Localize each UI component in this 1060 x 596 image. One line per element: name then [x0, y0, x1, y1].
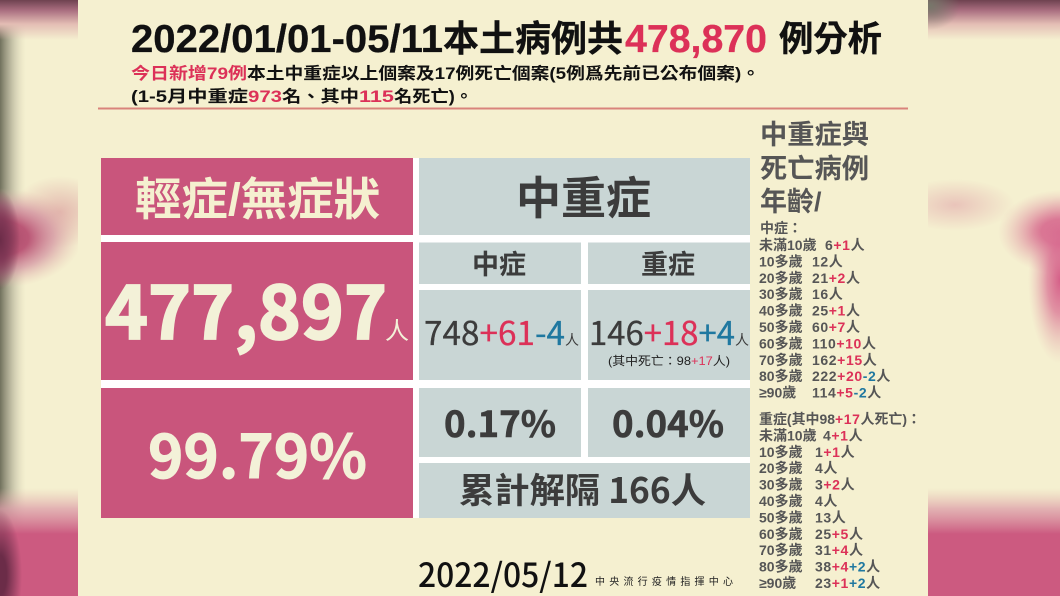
- moderate by age: +2人: [829, 270, 860, 286]
- moderate by age: 70多歲: [759, 352, 803, 368]
- moderate by age: 80多歲: [759, 368, 803, 384]
- severe percent: 0.04%: [612, 396, 724, 448]
- severe by age: +1人: [831, 427, 863, 443]
- moderate by age: 114: [812, 385, 836, 401]
- mild count: 477,897: [105, 255, 387, 361]
- moderate by age: 60: [812, 319, 829, 335]
- title: 478,870: [625, 18, 767, 61]
- severe by age: 1: [815, 444, 823, 460]
- sidebar heading: 死亡病例: [760, 154, 869, 184]
- severe by age: 10多歲: [759, 444, 803, 460]
- moderate by age: 16人: [812, 286, 843, 302]
- severe by age: +4+2人: [832, 559, 880, 575]
- heading: moderate and severe: 中重症: [516, 173, 651, 224]
- severe by age: 3: [815, 477, 823, 493]
- moderate by age: 110: [812, 335, 836, 351]
- subtitle: 973: [248, 88, 282, 106]
- moderate by age: 未滿10歲: [759, 237, 817, 253]
- severe by age: +4人: [832, 542, 863, 558]
- sidebar heading: [760, 120, 869, 217]
- moderate by age: 中症：: [760, 220, 802, 236]
- title: [131, 18, 882, 61]
- moderate by age: +5-2人: [836, 385, 881, 401]
- severe count: 人: [735, 332, 749, 348]
- moderate count: 人: [565, 332, 579, 348]
- severe by age: 13人: [815, 509, 846, 525]
- severe count: 146+18+4: [589, 307, 735, 355]
- severe by age: 80多歲: [759, 559, 803, 575]
- label: moderate: 中症: [472, 250, 526, 280]
- moderate by age: 40多歲: [759, 303, 803, 319]
- moderate by age: 10多歲: [759, 253, 803, 269]
- mild percent: 99.79%: [148, 409, 367, 496]
- moderate by age: 6: [825, 237, 833, 253]
- severe by age: 38: [815, 559, 832, 575]
- moderate by age: 25: [812, 303, 829, 319]
- severe by age: 50多歲: [759, 509, 803, 525]
- label: severe: 重症: [641, 250, 695, 280]
- moderate by age: +15人: [837, 352, 877, 368]
- severe by age: 4人: [815, 460, 838, 476]
- severe by age: +5人: [832, 526, 863, 542]
- severe deaths note: (其中死亡：98 +17人): [608, 353, 730, 368]
- moderate by age: +20-2人: [837, 368, 890, 384]
- subtitle: [131, 63, 760, 106]
- moderate by age: 30多歲: [759, 286, 803, 302]
- severe by age: 31: [815, 542, 832, 558]
- mild count: 人: [385, 318, 409, 345]
- severe by age: 4人: [815, 493, 838, 509]
- subtitle: 本土中重症以上個案及17例死亡個案(5例爲先前已公布個案)。: [247, 64, 760, 83]
- moderate by age: +1人: [833, 237, 865, 253]
- moderate by age: 222: [812, 368, 837, 384]
- severe by age: 未滿10歲: [759, 427, 817, 443]
- moderate percent: 0.17%: [444, 396, 556, 448]
- title: 2022/01/01-05/11: [131, 18, 443, 61]
- moderate by age: +7人: [829, 319, 860, 335]
- moderate by age: 162: [812, 352, 837, 368]
- source: CECC: 中央流行疫情指揮中心: [595, 575, 733, 588]
- severe by age: 25: [815, 526, 832, 542]
- sidebar heading: 中重症與: [760, 120, 869, 150]
- severe by age: 重症(其中98+17人死亡)：: [759, 411, 921, 427]
- severe by age: 4: [823, 427, 831, 443]
- sidebar heading: 年齡/: [760, 187, 822, 217]
- subtitle: 115: [359, 88, 394, 106]
- severe by age: +2人: [823, 477, 855, 493]
- severe by age: 60多歲: [759, 526, 803, 542]
- severe by age: 20多歲: [759, 460, 803, 476]
- title: 本土病例共: [443, 18, 623, 59]
- panel: moderate and severe: [419, 158, 750, 518]
- moderate by age: +10人: [836, 335, 876, 351]
- date: 2022/05/12: [418, 549, 588, 596]
- severe by age: [759, 411, 921, 591]
- severe by age: ≥90歲: [759, 575, 796, 591]
- severe by age: +1人: [823, 444, 855, 460]
- moderate by age: 60多歲: [759, 335, 803, 351]
- moderate by age: ≥90歲: [759, 385, 796, 401]
- heading: mild: 輕症/無症狀: [135, 174, 380, 225]
- severe by age: 70多歲: [759, 542, 803, 558]
- title: 例分析: [779, 20, 882, 59]
- subtitle: 今日新增79例: [131, 63, 247, 83]
- severe by age: +1+2人: [832, 575, 880, 591]
- moderate count: 748+61-4: [424, 307, 565, 355]
- severe by age: 40多歲: [759, 493, 803, 509]
- moderate by age: 21: [812, 270, 829, 286]
- moderate by age: 12人: [812, 253, 843, 269]
- moderate by age: 50多歲: [759, 319, 803, 335]
- moderate by age: [759, 220, 890, 401]
- subtitle: (1-5月中重症: [131, 87, 249, 106]
- severe by age: 30多歲: [759, 477, 803, 493]
- panel: mild / asymptomatic: [101, 158, 413, 518]
- released from isolation: 累計解隔 166人: [459, 463, 706, 514]
- subtitle: 名死亡)。: [394, 87, 473, 106]
- moderate by age: +1人: [829, 303, 860, 319]
- subtitle: 名、其中: [282, 87, 359, 106]
- severe by age: 23: [815, 575, 832, 591]
- moderate by age: 20多歲: [759, 270, 803, 286]
